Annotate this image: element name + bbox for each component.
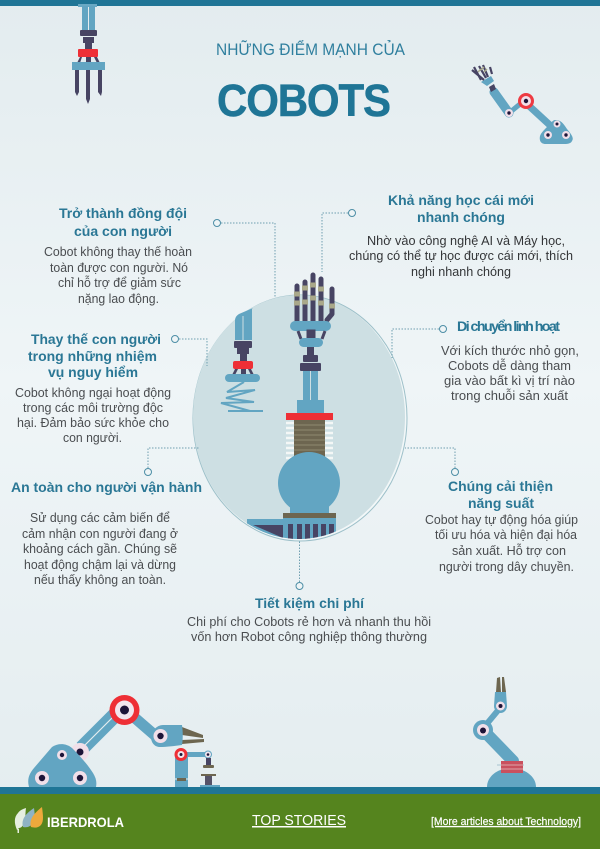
- text block: operator safety: [11, 480, 202, 587]
- icon: central robot hand: [278, 275, 340, 515]
- text block: productivity: sản xuất. Hỗ trợ con: [452, 543, 566, 558]
- text block: cost saving: [187, 596, 431, 644]
- text block: dangerous tasks: [15, 332, 171, 445]
- text block: cost saving: Chi phí cho Cobots rẻ hơn và nhanh thu hồi: [187, 615, 431, 629]
- text block: flexible movement: Với kích thước nhỏ gọn,: [441, 344, 579, 358]
- text block: operator safety: khoảng cách gần. Chúng sẽ: [23, 542, 177, 556]
- text block: teammate: [44, 206, 192, 306]
- text block: cost saving: vốn hơn Robot công nghiệp thông thường: [191, 630, 427, 644]
- icon: robot base: [247, 513, 336, 539]
- text block: flexible movement: [441, 319, 579, 403]
- text block: fast learning: nghi nhanh chóng: [411, 265, 511, 279]
- icon: top-left robot gripper: [72, 4, 105, 104]
- logo text: IBERDROLA: [47, 814, 124, 830]
- top bar: [0, 0, 600, 6]
- panel: central oval with arm: [193, 275, 407, 543]
- text block: fast learning: nhanh chóng: [417, 210, 505, 226]
- text block: productivity: năng suất: [468, 496, 534, 512]
- text block: operator safety: An toàn cho người vận hành: [11, 480, 202, 496]
- bottom bar: [0, 787, 600, 794]
- text block: dangerous tasks: trong các môi trường độc: [23, 401, 163, 415]
- text block: productivity: Chúng cải thiện: [448, 479, 553, 495]
- text block: cost saving: Tiết kiệm chi phí: [255, 596, 365, 612]
- text block: fast learning: [349, 193, 573, 279]
- text block: operator safety: Sử dụng các cảm biến để: [30, 511, 170, 525]
- text block: fast learning: Nhờ vào công nghệ AI và Máy học,: [367, 234, 565, 248]
- text block: dangerous tasks: vụ nguy hiểm: [48, 365, 138, 381]
- text block: operator safety: hoạt động chậm lại và dừng: [24, 558, 176, 572]
- text block: teammate: của con người: [74, 224, 172, 240]
- text block: flexible movement: Di chuyển linh hoạt: [457, 319, 560, 335]
- icon: bottom-right robot: [473, 677, 536, 787]
- link: more articles: [More articles about Technology]: [431, 816, 581, 828]
- text block: flexible movement: trong chuỗi sản xuất: [451, 388, 569, 403]
- icon: spring gripper: [221, 308, 263, 411]
- text block: operator safety: nếu thấy không an toàn.: [34, 573, 166, 587]
- text block: productivity: người trong dây chuyền.: [439, 560, 574, 574]
- text block: flexible movement: gia vào bất kì vị trí nào: [444, 374, 575, 388]
- text block: teammate: toàn được con người. Nó: [50, 261, 188, 275]
- title: COBOTS: [217, 75, 391, 126]
- text block: fast learning: Khả năng học cái mới: [388, 193, 534, 209]
- text block: dangerous tasks: Thay thế con người: [31, 332, 161, 348]
- link: top stories: TOP STORIES: [252, 812, 346, 829]
- text block: dangerous tasks: con người.: [63, 431, 122, 445]
- text block: productivity: [425, 479, 578, 574]
- connector lines: [144, 210, 458, 590]
- text block: productivity: Cobot hay tự động hóa giúp: [425, 513, 578, 527]
- text block: flexible movement: Cobots dễ dàng tham: [448, 358, 571, 373]
- text block: teammate: nặng lao động.: [78, 292, 159, 306]
- title: NHỮNG ĐIỂM MẠNH CỦA: [216, 40, 406, 59]
- text block: teammate: Cobot không thay thế hoàn: [44, 245, 192, 259]
- icon: top-right robot arm: [472, 65, 573, 144]
- icon: bottom-left small robot: [173, 748, 220, 788]
- text block: teammate: chỉ hỗ trợ để giảm sức: [58, 275, 181, 290]
- text block: productivity: tối ưu hóa và hiện đại hóa: [435, 528, 577, 542]
- text block: operator safety: cảm nhận con người đang ở: [22, 527, 178, 541]
- text block: fast learning: chúng có thể tự học được cái mới, thích: [349, 249, 573, 263]
- icon: bottom-left large robot arm: [28, 695, 204, 787]
- text block: dangerous tasks: trong những nhiệm: [28, 349, 157, 365]
- text block: teammate: Trở thành đồng đội: [59, 206, 187, 222]
- text block: dangerous tasks: Cobot không ngại hoạt động: [15, 386, 171, 400]
- text block: dangerous tasks: hại. Đảm bảo sức khỏe cho: [17, 416, 169, 430]
- icon: Iberdrola logo: [15, 807, 43, 833]
- footer: [0, 794, 600, 849]
- title: [216, 40, 406, 126]
